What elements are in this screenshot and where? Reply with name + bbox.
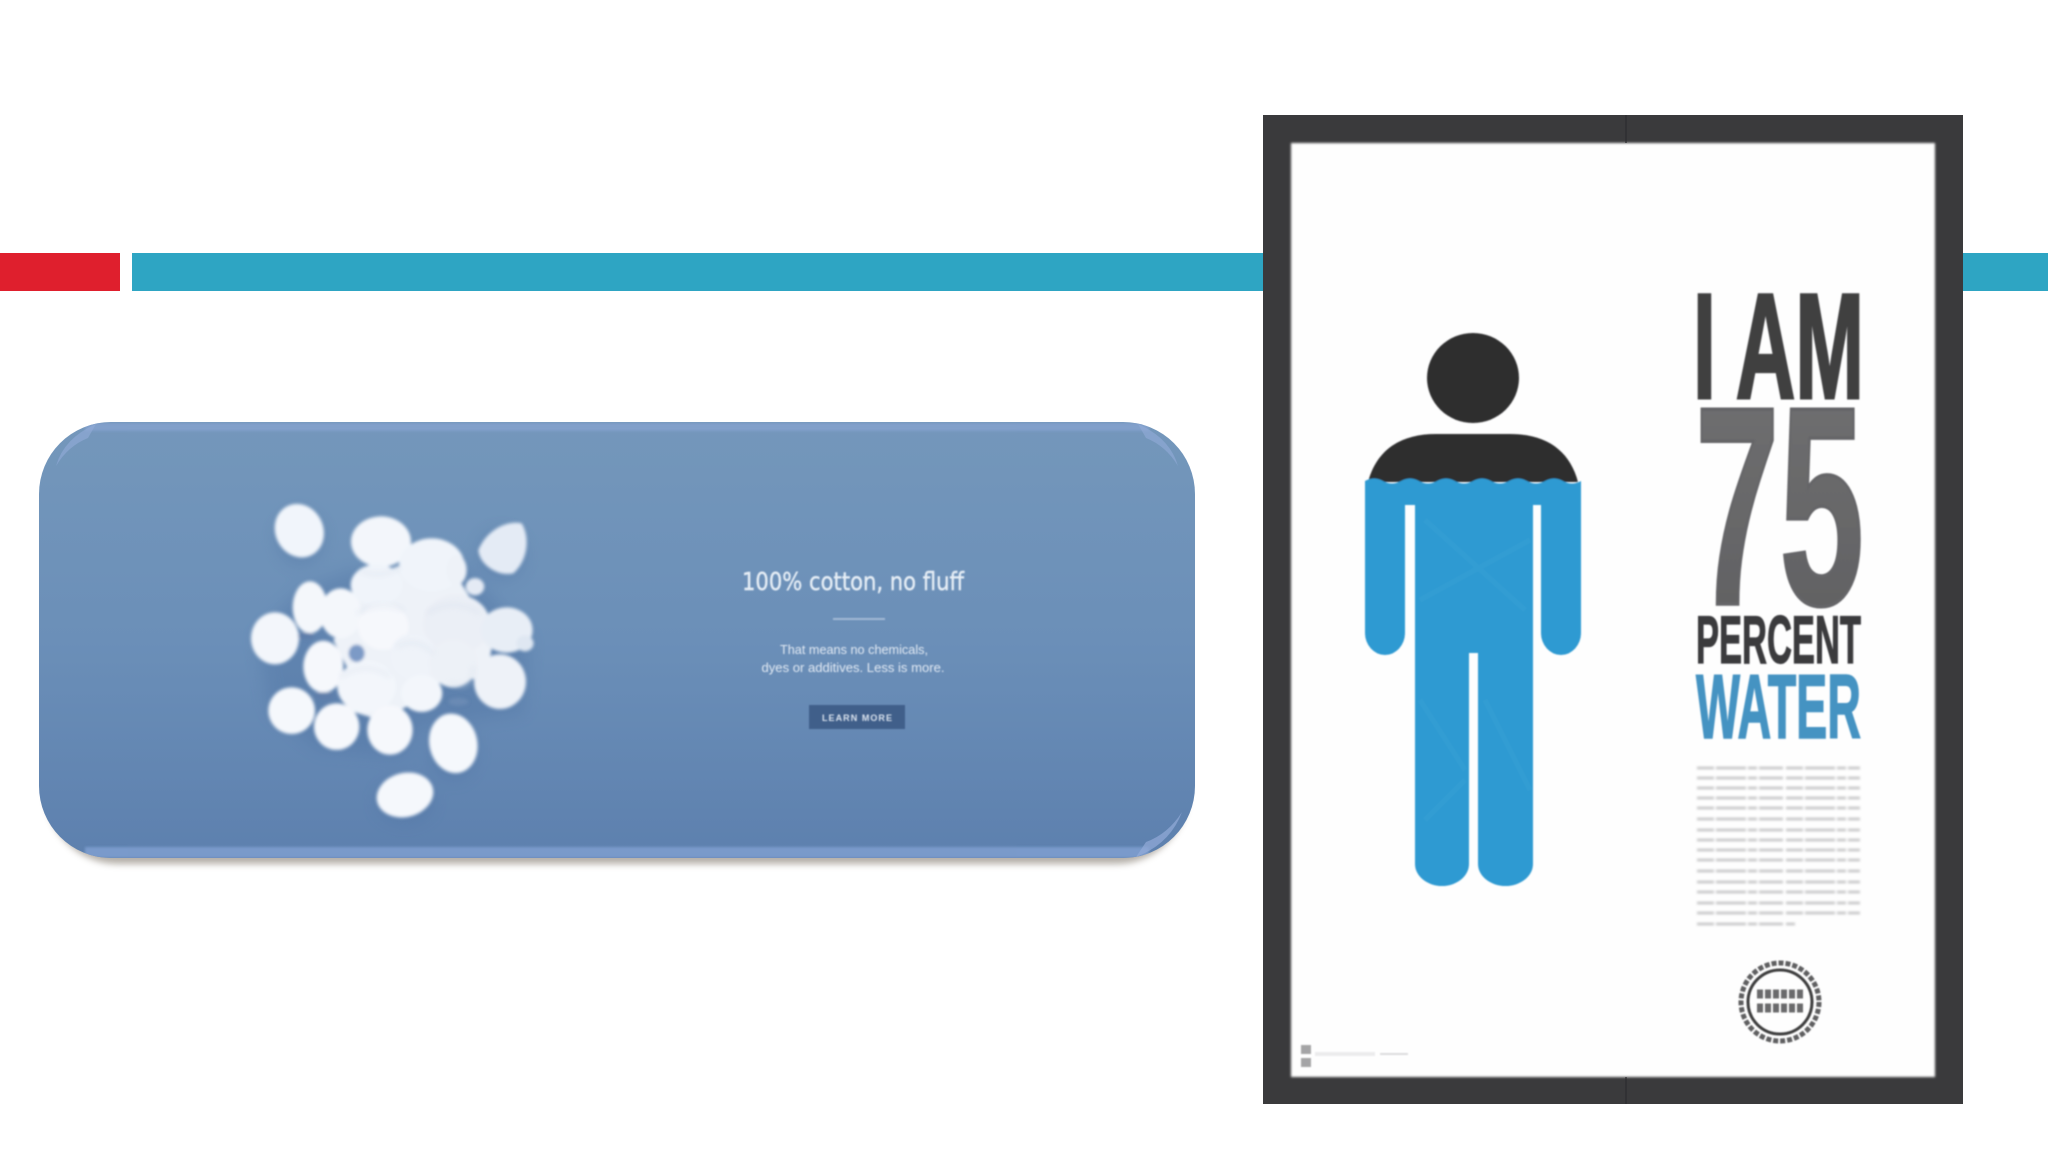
panel bevel highlights [56,423,1182,858]
panel: cotton banner [39,422,1195,864]
figure texture [1420,520,1530,820]
body text: That means no chemicals, [780,642,928,657]
cotton ball cluster [251,496,534,823]
poster fine print (illegible in reference, drawn as lines) [1697,768,1860,924]
panel: water poster [1263,115,1963,1104]
I AM: I AM [1693,262,1864,430]
icon: human figure [1365,333,1581,886]
icon: cotton balls [251,496,534,823]
panel shadow [46,434,1188,864]
PERCENT: PERCENT [1696,602,1861,678]
panel background [39,422,1195,858]
poster frame seams [1625,115,1627,1104]
cotton ball shadows [257,512,530,823]
figure water body [1365,478,1581,886]
teal header bar [132,253,2048,291]
cotton ball inner shading [340,567,480,686]
heading: 100% cotton, no fluff: 100% cotton, no fluff [742,567,965,596]
poster footer marks [1301,1045,1408,1067]
button: learn more [809,705,905,729]
WATER: WATER [1696,657,1861,758]
button: learn more: LEARN MORE [822,713,892,723]
figure head [1427,333,1519,423]
poster paper [1291,143,1935,1077]
divider [833,618,885,620]
figure shoulders [1368,434,1578,482]
icon: poster badge [1741,963,1819,1041]
75: 75 [1695,348,1864,664]
red accent bar [0,253,120,291]
body text [762,642,944,675]
body text: dyes or additives. Less is more. [762,660,944,675]
poster frame [1263,115,1963,1104]
poster headline [1693,262,1864,758]
